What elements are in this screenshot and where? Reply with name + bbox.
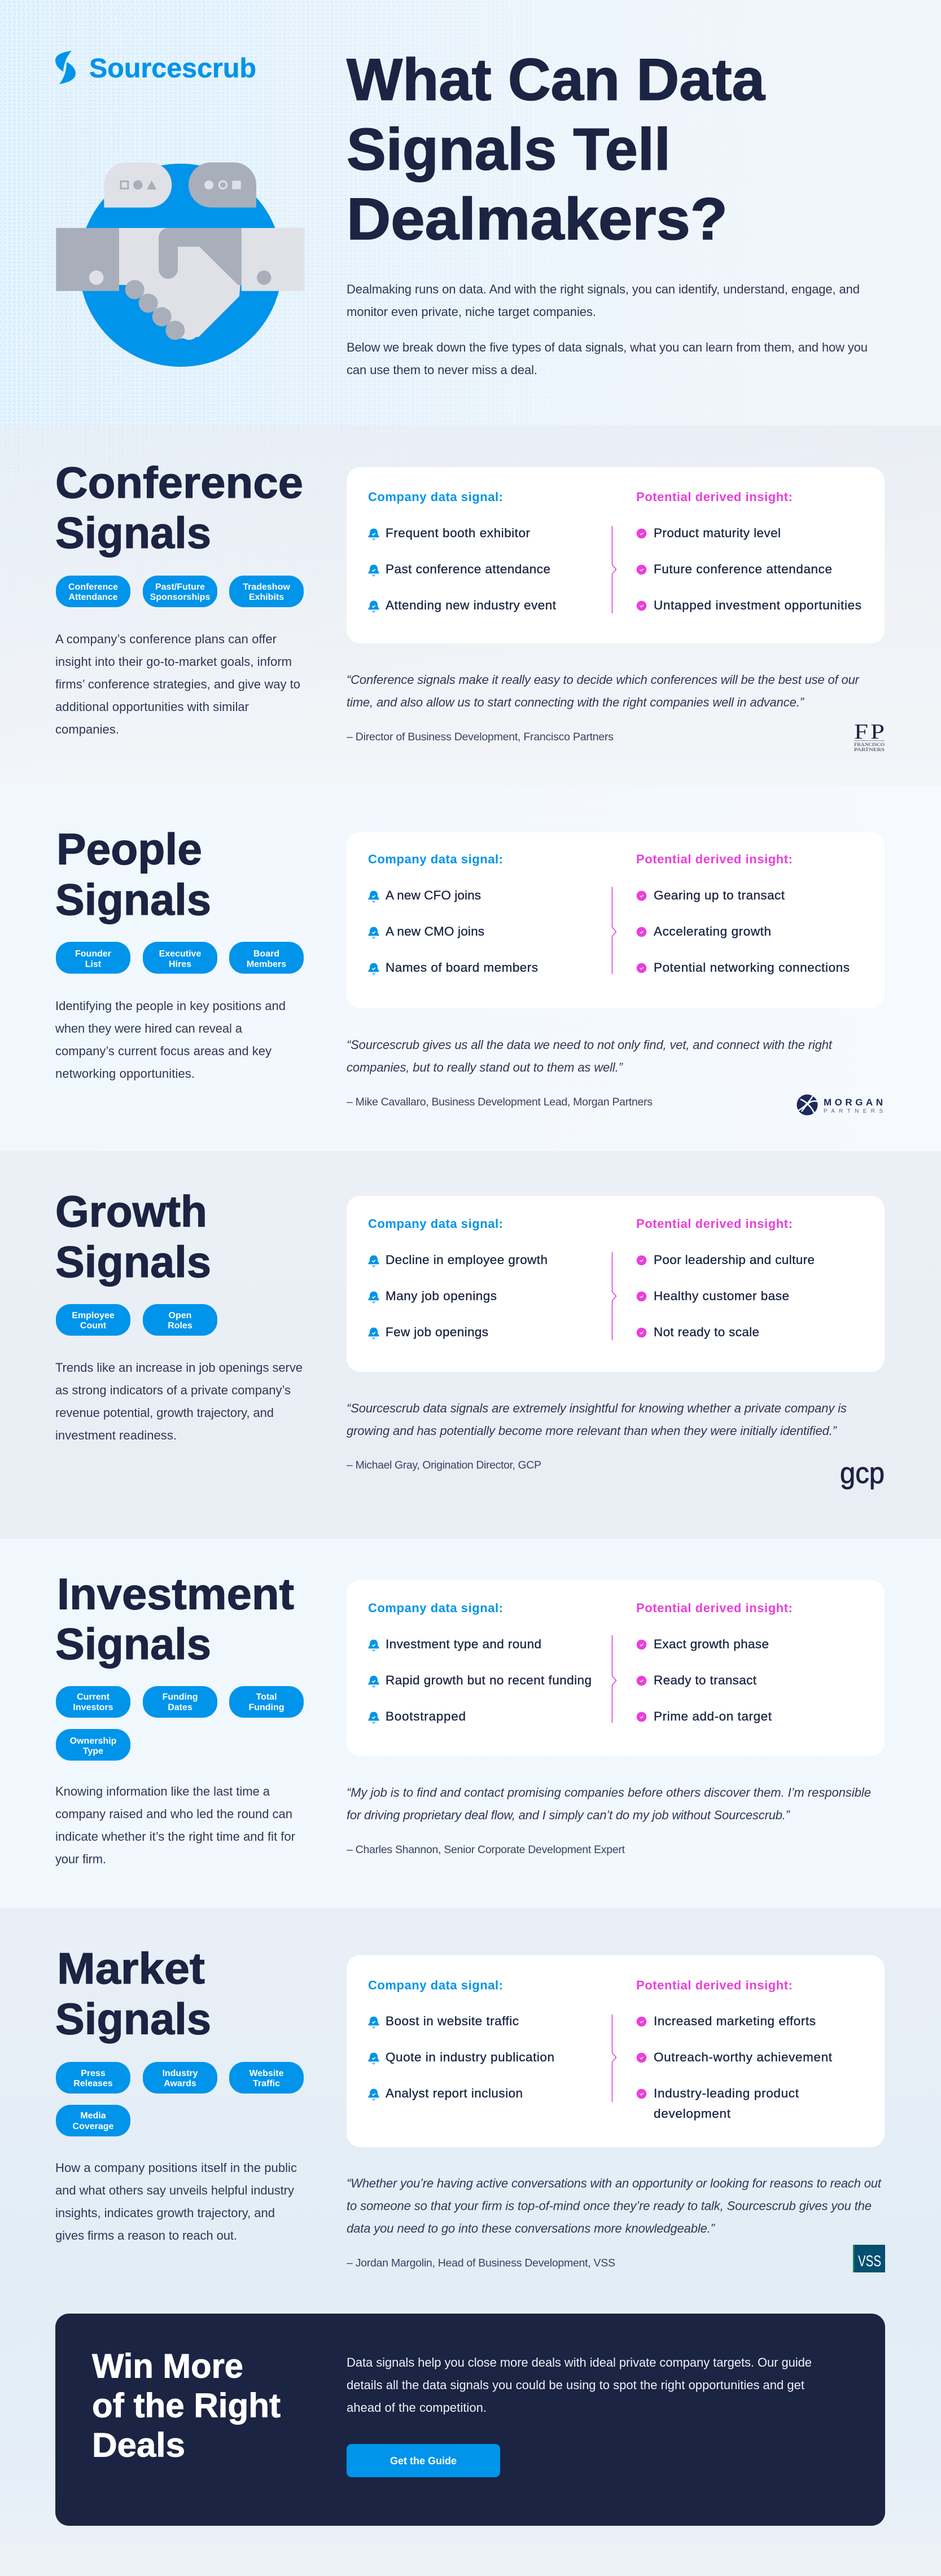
signal card: Analyst report inclusion	[386, 2086, 523, 2100]
signal card: Attending new industry event	[386, 598, 557, 612]
description: How a company positions itself in the public	[55, 2161, 297, 2175]
description: additional opportunities with similar	[55, 700, 249, 714]
heading: Investment	[57, 1569, 294, 1618]
description	[55, 1784, 295, 1866]
signal card: Potential derived insight:	[636, 490, 793, 504]
quote: data you need to go into these conversations more knowledgeable.”	[347, 2221, 716, 2236]
tags: Funding	[248, 1703, 285, 1712]
signal card: Potential derived insight:	[636, 852, 793, 866]
panel: conference signals	[55, 458, 885, 752]
heading: Signals	[55, 1619, 211, 1669]
tags	[56, 576, 304, 607]
signal card: Quote in industry publication	[386, 2050, 554, 2064]
quote: – Director of Business Development, Francisco Partners	[347, 731, 614, 743]
signal card: Bootstrapped	[386, 1709, 466, 1723]
description: Trends like an increase in job openings serve	[55, 1361, 303, 1375]
tags: Dates	[168, 1703, 192, 1712]
signal card: Not ready to scale	[654, 1325, 759, 1339]
quote: “Conference signals make it really easy to decide which conferences will be the best use of our	[347, 673, 860, 687]
signal card: Names of board members	[386, 960, 538, 975]
quote: time, and also allow us to start connecting with the right companies well in advance.”	[347, 695, 805, 709]
signal card: Company data signal:	[368, 1601, 503, 1615]
signal card: Prime add-on target	[654, 1709, 772, 1723]
logo: Francisco Partners: PARTNERS	[854, 747, 885, 752]
signal card: Company data signal:	[368, 852, 503, 866]
logo: Morgan Partners: MORGAN	[824, 1097, 883, 1108]
tags: Website	[249, 2069, 284, 2078]
signal card: Increased marketing efforts	[654, 2014, 816, 2028]
hero background	[0, 0, 941, 425]
signal card: Company data signal:	[368, 490, 503, 504]
tags: Roles	[168, 1321, 192, 1331]
intro text: monitor even private, niche target companies.	[347, 305, 596, 319]
quote	[347, 1401, 847, 1472]
heading	[55, 824, 211, 924]
description: A company’s conference plans can offer	[55, 632, 277, 646]
title: Signals Tell	[347, 116, 671, 183]
description: companies.	[55, 722, 119, 736]
tags: Employee	[72, 1311, 115, 1320]
signal card	[347, 832, 885, 1008]
call to action panel	[55, 2314, 885, 2526]
tags: Ownership	[70, 1736, 117, 1746]
CTA text: ahead of the competition.	[347, 2401, 487, 2415]
CTA button: Get the Guide	[390, 2455, 457, 2467]
description	[55, 2161, 297, 2243]
tags: Coverage	[73, 2122, 114, 2131]
section background: people	[0, 785, 941, 1151]
tags: Total	[256, 1692, 277, 1702]
tags: Investors	[73, 1703, 113, 1712]
signal card: Rapid growth but no recent funding	[386, 1673, 592, 1687]
intro text	[347, 282, 868, 377]
signal card: Potential networking connections	[654, 960, 850, 975]
heading: Signals	[55, 1237, 211, 1287]
blue circle	[79, 164, 282, 367]
illustration: handshake	[56, 163, 304, 367]
heading: Signals	[55, 508, 211, 558]
speech bubble left	[104, 163, 172, 208]
signal card: Past conference attendance	[386, 562, 550, 576]
CTA heading	[92, 2347, 281, 2464]
logo: VSS: VSS	[858, 2252, 881, 2270]
logo: Francisco Partners: F	[854, 720, 868, 744]
description	[55, 999, 286, 1081]
CTA heading: of the Right	[92, 2387, 281, 2424]
tags: Type	[83, 1746, 103, 1756]
signal card: Company data signal:	[368, 1217, 503, 1231]
signal card: development	[654, 2107, 731, 2121]
quote: “Sourcescrub data signals are extremely insightful for knowing whether a private company is	[347, 1401, 847, 1415]
tags: Count	[80, 1321, 107, 1331]
tags: Executive	[159, 949, 201, 959]
quote: growing and has potentially become more relevant than when they were initially identified.”	[347, 1424, 838, 1438]
description: Identifying the people in key positions and	[55, 999, 286, 1013]
tags: Attendance	[68, 593, 118, 602]
CTA text: Data signals help you close more deals with ideal private company targets. Our guide	[347, 2355, 812, 2369]
clasped hands	[119, 228, 242, 340]
tags: Releases	[73, 2079, 113, 2088]
description: insights, indicates growth trajectory, and	[55, 2206, 275, 2220]
tags	[56, 2062, 304, 2136]
signal card: Outreach-worthy achievement	[654, 2050, 833, 2064]
heading: Signals	[55, 1994, 211, 2044]
logo: Sourcescrub	[55, 51, 256, 84]
quote	[347, 1785, 871, 1856]
CTA heading: Deals	[92, 2426, 185, 2464]
tags: Conference	[68, 582, 118, 592]
quote: – Charles Shannon, Senior Corporate Development Expert	[347, 1844, 625, 1856]
description: investment readiness.	[55, 1428, 177, 1442]
description: revenue potential, growth trajectory, and	[55, 1406, 274, 1420]
signal card: Boost in website traffic	[386, 2014, 519, 2028]
description: networking opportunities.	[55, 1067, 195, 1081]
quote: companies, but to really stand out to them as well.”	[347, 1060, 624, 1074]
tags: Open	[169, 1311, 191, 1320]
heading: Growth	[55, 1186, 207, 1236]
description	[55, 632, 300, 736]
description: company raised and who led the round can	[55, 1807, 292, 1821]
quote	[347, 1038, 833, 1108]
right cuff	[242, 228, 304, 291]
tags: Media	[80, 2111, 106, 2121]
signal card: Frequent booth exhibitor	[386, 526, 531, 540]
quote	[347, 673, 860, 743]
description: Knowing information like the last time a	[55, 1784, 270, 1798]
quote: – Mike Cavallaro, Business Development Lead, Morgan Partners	[347, 1096, 653, 1108]
signal card: Many job openings	[386, 1289, 497, 1303]
description: your firm.	[55, 1852, 106, 1866]
description: insight into their go-to-market goals, inform	[55, 655, 292, 669]
signal card: Healthy customer base	[654, 1289, 789, 1303]
logo: GCP: gcp	[840, 1457, 885, 1490]
signal card: Investment type and round	[386, 1637, 541, 1651]
CTA heading: Win More	[92, 2347, 243, 2385]
tags: Tradeshow	[243, 582, 290, 592]
title: What Can Data	[347, 47, 766, 113]
panel: growth signals	[55, 1186, 885, 1490]
heading	[55, 458, 303, 558]
tags	[56, 1686, 304, 1761]
section background: investment	[0, 1539, 941, 1908]
signal card: Decline in employee growth	[386, 1253, 548, 1267]
quote: – Jordan Margolin, Head of Business Development, VSS	[347, 2257, 615, 2270]
signal card: Poor leadership and culture	[654, 1253, 815, 1267]
signal card: Company data signal:	[368, 1978, 503, 1992]
logo: Morgan Partners	[797, 1095, 883, 1115]
tags: Sponsorships	[150, 593, 210, 602]
tags	[56, 1304, 217, 1336]
heading: Conference	[55, 458, 303, 507]
tags: Exhibits	[249, 593, 284, 602]
signal card: Potential derived insight:	[636, 1601, 793, 1615]
signal card	[347, 1955, 885, 2147]
left cuff	[56, 228, 119, 291]
tags: Board	[253, 949, 279, 959]
heading	[55, 1569, 294, 1669]
heading: People	[56, 824, 202, 874]
signal card: Industry-leading product	[654, 2086, 799, 2100]
section background: market and footer	[0, 1908, 941, 2576]
signal card: Ready to transact	[654, 1673, 757, 1687]
title: Dealmakers?	[347, 186, 728, 252]
tags: List	[85, 959, 102, 969]
quote: to someone so that your firm is top-of-mind once they’re ready to talk, Sourcescrub gives you the	[347, 2198, 872, 2213]
signal card: Future conference attendance	[654, 562, 832, 576]
tags: Industry	[162, 2069, 198, 2078]
description: when they were hired can reveal a	[55, 1021, 243, 1035]
CTA button	[347, 2444, 500, 2477]
wordmark: Sourcescrub	[89, 54, 256, 84]
tags: Funding	[162, 1692, 198, 1702]
panel: investment signals	[55, 1569, 885, 1866]
signal card: Exact growth phase	[654, 1637, 769, 1651]
tags: Press	[81, 2069, 106, 2078]
quote: for driving proprietary deal flow, and I simply can’t do my job without Sourcescrub.”	[347, 1808, 791, 1822]
panel: market signals	[55, 1943, 885, 2272]
logo: Francisco Partners: P	[870, 720, 885, 744]
quote	[347, 2176, 882, 2270]
tags: Traffic	[253, 2079, 280, 2088]
signal card	[347, 1580, 885, 1756]
signal card: Gearing up to transact	[654, 888, 785, 902]
panel: people signals	[55, 824, 885, 1115]
signal card: A new CFO joins	[386, 888, 481, 902]
signal card: Potential derived insight:	[636, 1217, 793, 1231]
quote: – Michael Gray, Origination Director, GCP	[347, 1459, 541, 1472]
CTA text	[347, 2355, 812, 2415]
heading: Market	[57, 1943, 205, 1993]
signal card: Product maturity level	[654, 526, 781, 540]
section background: conference	[0, 425, 941, 785]
signal card: Untapped investment opportunities	[654, 598, 861, 612]
speech bubble right	[189, 163, 256, 208]
tags: Awards	[164, 2079, 196, 2088]
signal card: A new CMO joins	[386, 924, 484, 938]
signal card	[347, 467, 885, 643]
quote: “Sourcescrub gives us all the data we need to not only find, vet, and connect with the right	[347, 1038, 833, 1052]
description: firms’ conference strategies, and give way to	[55, 677, 300, 691]
intro text: Dealmaking runs on data. And with the right signals, you can identify, understand, engage, and	[347, 282, 860, 296]
heading	[55, 1943, 211, 2044]
logo: VSS	[853, 2245, 885, 2272]
signal card: Accelerating growth	[654, 924, 771, 938]
signal card	[347, 1196, 885, 1372]
intro text: can use them to never miss a deal.	[347, 363, 537, 377]
logo: Morgan Partners: PARTNERS	[824, 1108, 883, 1114]
icon: Sourcescrub S mark	[55, 51, 76, 84]
heading: Signals	[55, 875, 211, 924]
heading	[55, 1186, 211, 1287]
logo: Francisco Partners: FRANCISCO	[854, 741, 885, 747]
CTA text: details all the data signals you could be using to spot the right opportunities and get	[347, 2378, 804, 2392]
signal card: Few job openings	[386, 1325, 488, 1339]
quote: “My job is to find and contact promising companies before others discover them. I’m responsible	[347, 1785, 871, 1800]
description: company’s current focus areas and key	[55, 1044, 272, 1058]
signal card: Potential derived insight:	[636, 1978, 793, 1992]
tags: Members	[247, 959, 286, 969]
tags: Past/Future	[155, 582, 205, 592]
description: gives firms a reason to reach out.	[55, 2228, 237, 2243]
section background: growth	[0, 1151, 941, 1539]
tags: Current	[77, 1692, 110, 1702]
tags: Hires	[169, 959, 191, 969]
tags: Founder	[75, 949, 111, 959]
description: as strong indicators of a private company’s	[55, 1383, 291, 1397]
logo: Francisco Partners	[854, 720, 885, 752]
description	[55, 1361, 303, 1442]
tags	[56, 942, 304, 974]
intro text: Below we break down the five types of data signals, what you can learn from them, and how you	[347, 340, 868, 354]
quote: “Whether you’re having active conversations with an opportunity or looking for reasons to reach out	[347, 2176, 882, 2191]
title	[347, 47, 766, 252]
description: indicate whether it’s the right time and fit for	[55, 1829, 295, 1844]
description: and what others say unveils helpful industry	[55, 2183, 294, 2197]
